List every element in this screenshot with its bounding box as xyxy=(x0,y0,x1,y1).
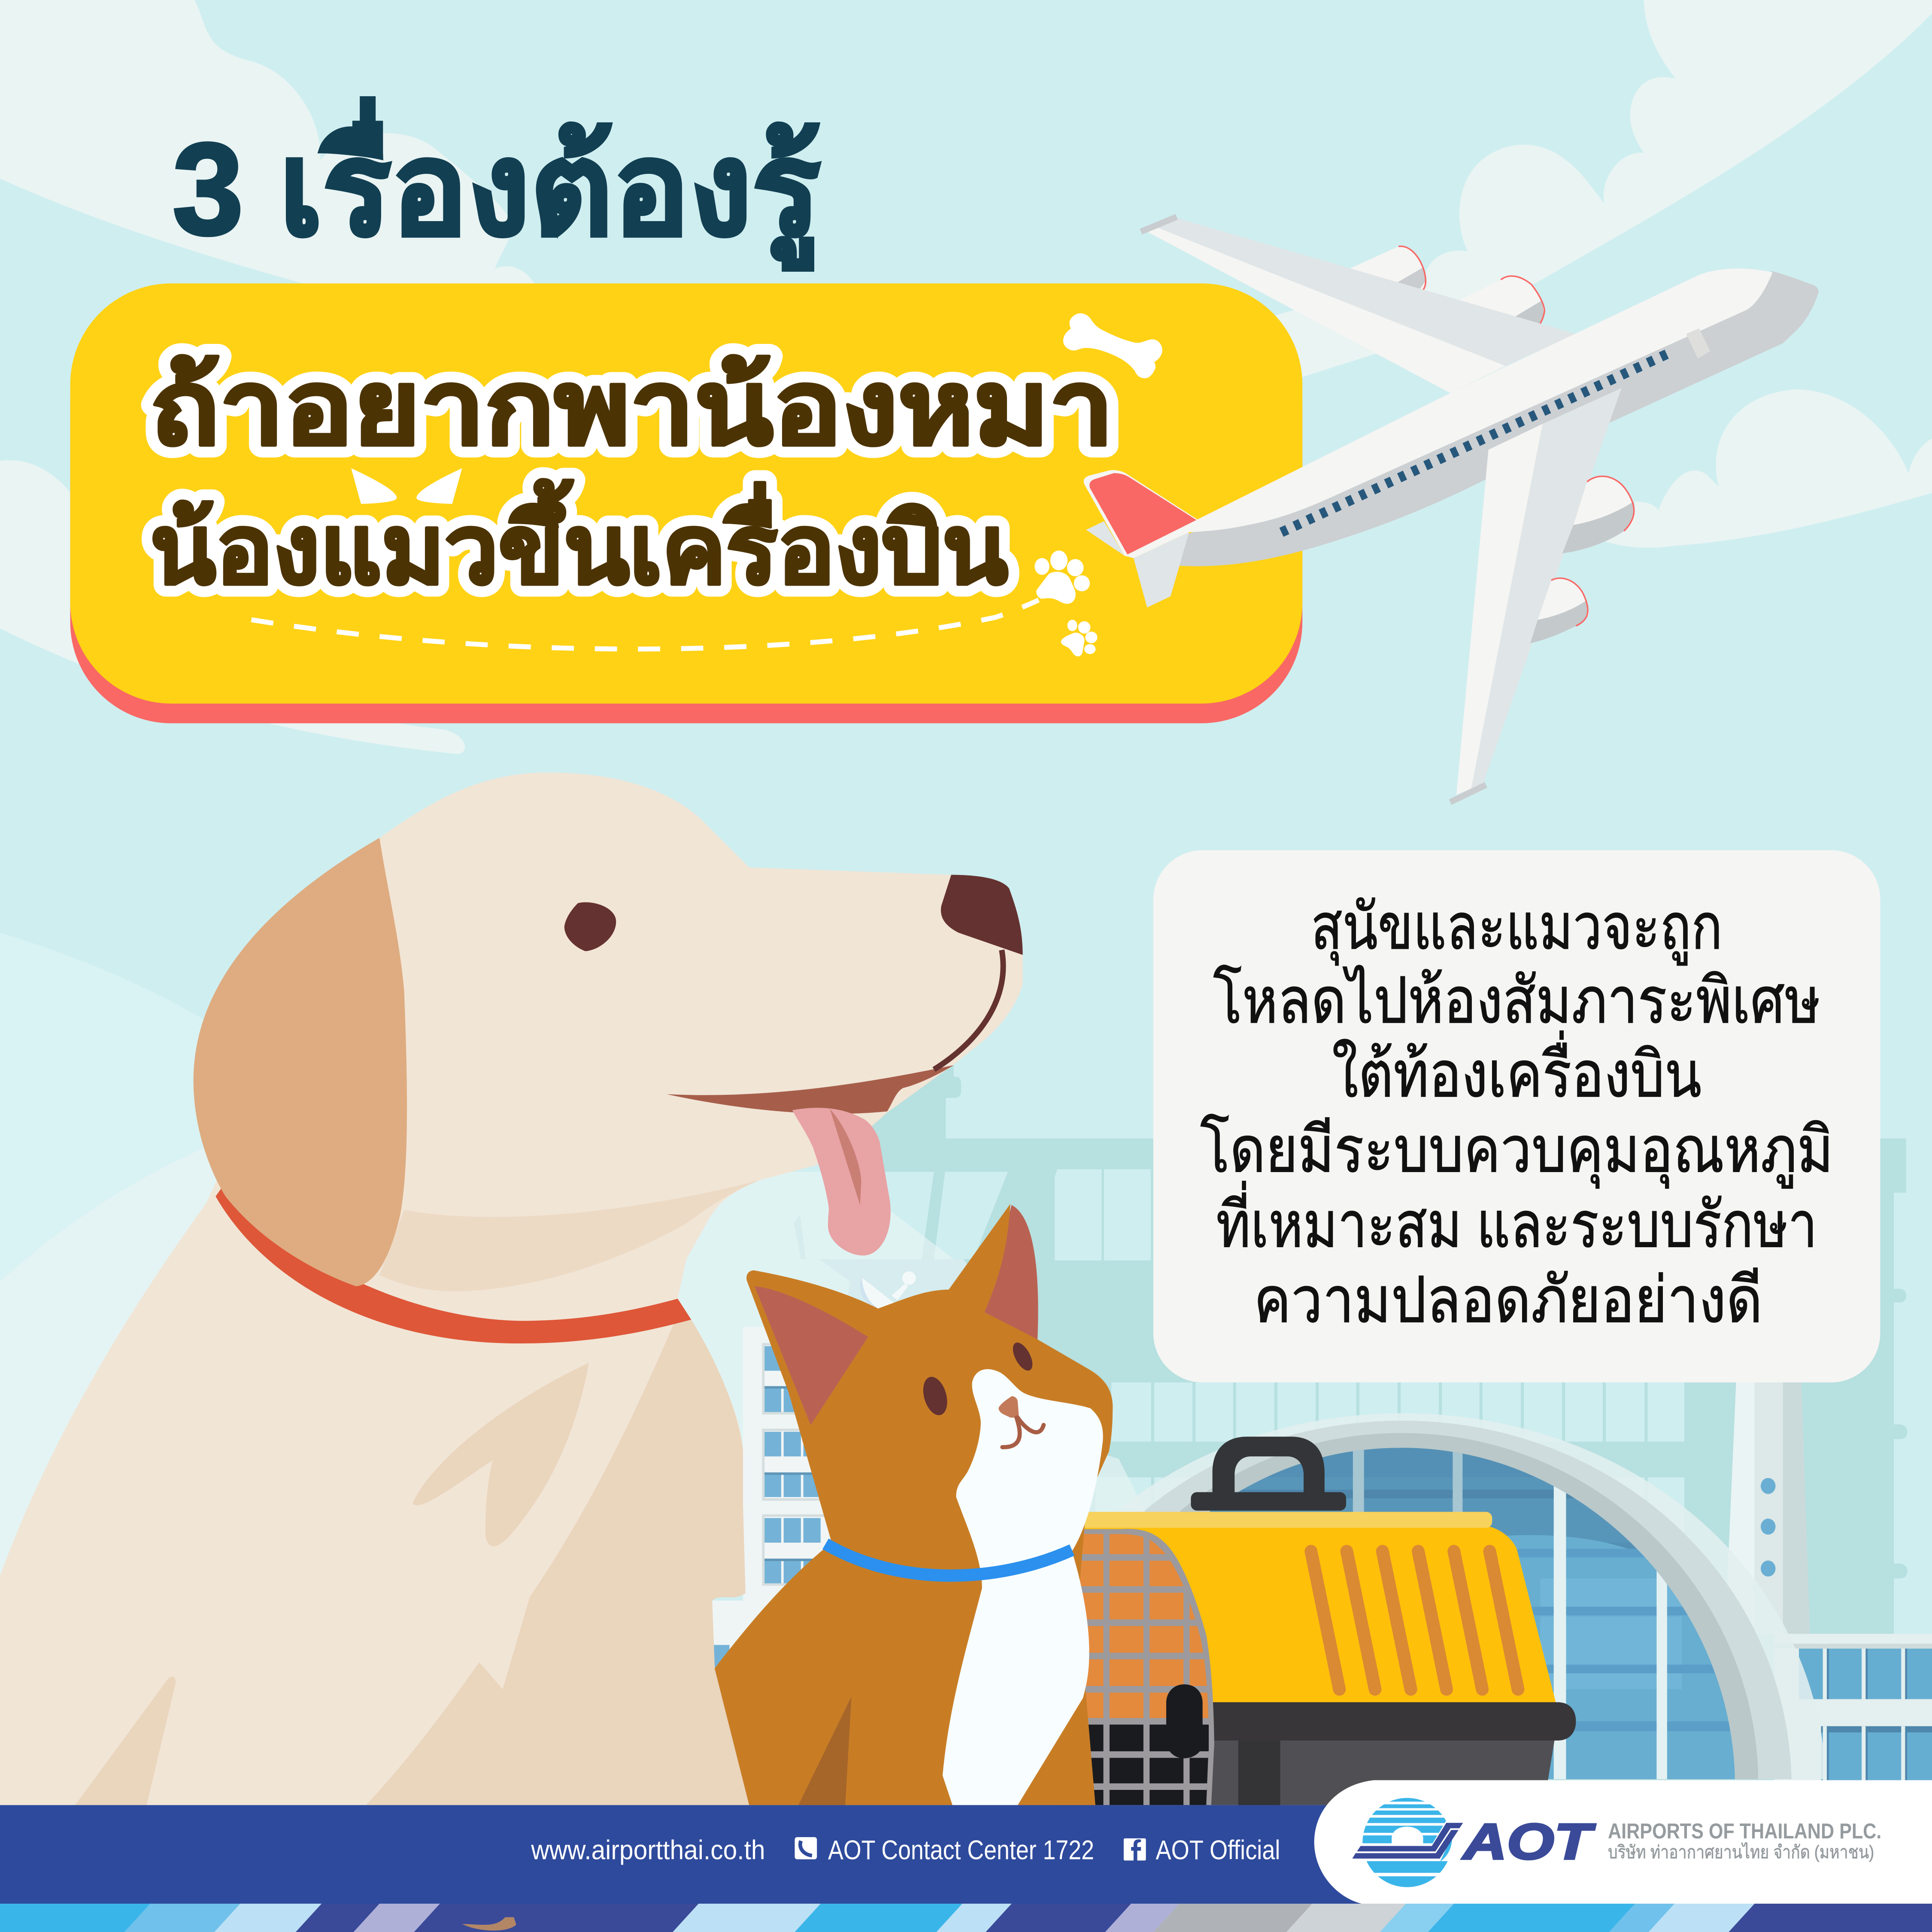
fuselage lower xyxy=(1177,271,1819,566)
body text: ความปลอดภัยอย่างดี xyxy=(1254,1264,1762,1336)
body text: สุนัขและแมวจะถูก xyxy=(1311,891,1723,966)
cat body xyxy=(715,1204,1113,1805)
body text: ใต้ท้องเครื่องบิน xyxy=(1332,1030,1701,1110)
footer facebook name: AOT Official xyxy=(1156,1835,1280,1865)
cat left ear inner xyxy=(755,1286,868,1425)
icon: cat ears xyxy=(351,468,462,504)
latch xyxy=(1166,1684,1209,1758)
cat leg shadow xyxy=(798,1697,852,1805)
cat xyxy=(715,1204,1113,1805)
headline xyxy=(150,350,1114,603)
cat white bib xyxy=(943,1369,1103,1805)
icon: bone xyxy=(1063,313,1162,378)
carrier body xyxy=(1060,1527,1556,1704)
AOT logo emblem xyxy=(1352,1798,1463,1887)
icon: phone xyxy=(795,1837,817,1859)
engines far xyxy=(1347,246,1544,327)
icon: small paw xyxy=(1061,620,1097,656)
leg mark xyxy=(75,1677,176,1805)
headline: น้องแมวขึ้นเครื่องบิน xyxy=(150,479,1008,603)
glass xyxy=(1210,1448,1735,1779)
tail fin xyxy=(1089,473,1196,554)
left tower building xyxy=(712,1327,854,1684)
cat eyes xyxy=(919,1374,951,1418)
door frame xyxy=(1060,1529,1214,1805)
headline: น้องแมวขึ้นเครื่องบิน xyxy=(150,479,1008,603)
dog mouth line xyxy=(934,950,1003,1069)
icon: facebook xyxy=(1124,1838,1146,1861)
right building xyxy=(1774,1634,1932,1780)
background hills xyxy=(0,933,234,1602)
engines near xyxy=(1530,476,1635,643)
dog collar xyxy=(215,1184,691,1343)
company name thai: บริษัท ท่าอากาศยานไทย จำกัด (มหาชน) xyxy=(1608,1842,1874,1862)
dog neck shadow xyxy=(379,1180,759,1291)
body text: ที่เหมาะสม และระบบรักษา xyxy=(1216,1181,1817,1261)
door grid xyxy=(1080,1534,1209,1805)
body text xyxy=(1200,891,1833,1336)
title: 3 เรื่องต้องรู้ xyxy=(173,97,821,271)
cat mouth xyxy=(1002,1418,1043,1447)
yellow title panel xyxy=(70,283,1302,723)
logo white panel xyxy=(1314,1780,1932,1904)
dog chest shadow xyxy=(366,1320,749,1805)
far wing xyxy=(1145,228,1506,393)
icon: big paw xyxy=(1034,550,1090,604)
stripes xyxy=(1311,1551,1518,1689)
cat nose xyxy=(998,1396,1019,1418)
body text: โหลดไปห้องสัมภาระพิเศษ xyxy=(1213,965,1820,1036)
tail fin white edge xyxy=(1084,470,1198,558)
windows xyxy=(1281,351,1673,532)
dog xyxy=(0,772,1023,1805)
right tower xyxy=(1725,1382,1810,1634)
clouds: sky background xyxy=(0,0,1932,754)
near wing xyxy=(1456,424,1543,795)
headline: ถ้าอยากพาน้องหมา xyxy=(150,350,1114,466)
dog tongue xyxy=(792,1108,891,1255)
AOT wordmark: AOT xyxy=(1462,1813,1596,1870)
door xyxy=(1686,328,1710,358)
dashed flight path xyxy=(252,600,1039,649)
satellite dish xyxy=(860,1271,916,1311)
dog ear xyxy=(194,838,407,1286)
body text panel xyxy=(1153,850,1880,1382)
body text: โดยมีระบบควบคุมอุณหภูมิ xyxy=(1200,1114,1833,1188)
cat right ear inner xyxy=(985,1205,1038,1340)
dog mouth xyxy=(667,1065,954,1114)
base xyxy=(1183,1738,1555,1805)
airport terminal background xyxy=(678,1065,1908,1780)
carrier handle xyxy=(1213,1437,1325,1504)
cat collar xyxy=(825,1544,1072,1576)
footer website: www.airportthai.co.th xyxy=(531,1835,765,1865)
fuselage upper xyxy=(1189,269,1773,532)
stabilizers xyxy=(1086,521,1125,556)
footer blue bar xyxy=(0,1805,1932,1904)
dog body xyxy=(0,772,1023,1805)
company name english: AIRPORTS OF THAILAND PLC. xyxy=(1608,1819,1881,1843)
dog eye xyxy=(564,902,616,951)
headline: ถ้าอยากพาน้องหมา xyxy=(150,350,1114,466)
terminal arch xyxy=(1118,1413,1826,1786)
airplane xyxy=(1084,217,1819,802)
dog nose xyxy=(941,875,1023,955)
carrier xyxy=(1060,1437,1576,1807)
bottom stripes xyxy=(0,1904,1932,1932)
cat lower wedge xyxy=(1018,1698,1095,1805)
footer contact: AOT Contact Center 1722 xyxy=(828,1835,1094,1865)
chest mark xyxy=(413,1363,589,1546)
